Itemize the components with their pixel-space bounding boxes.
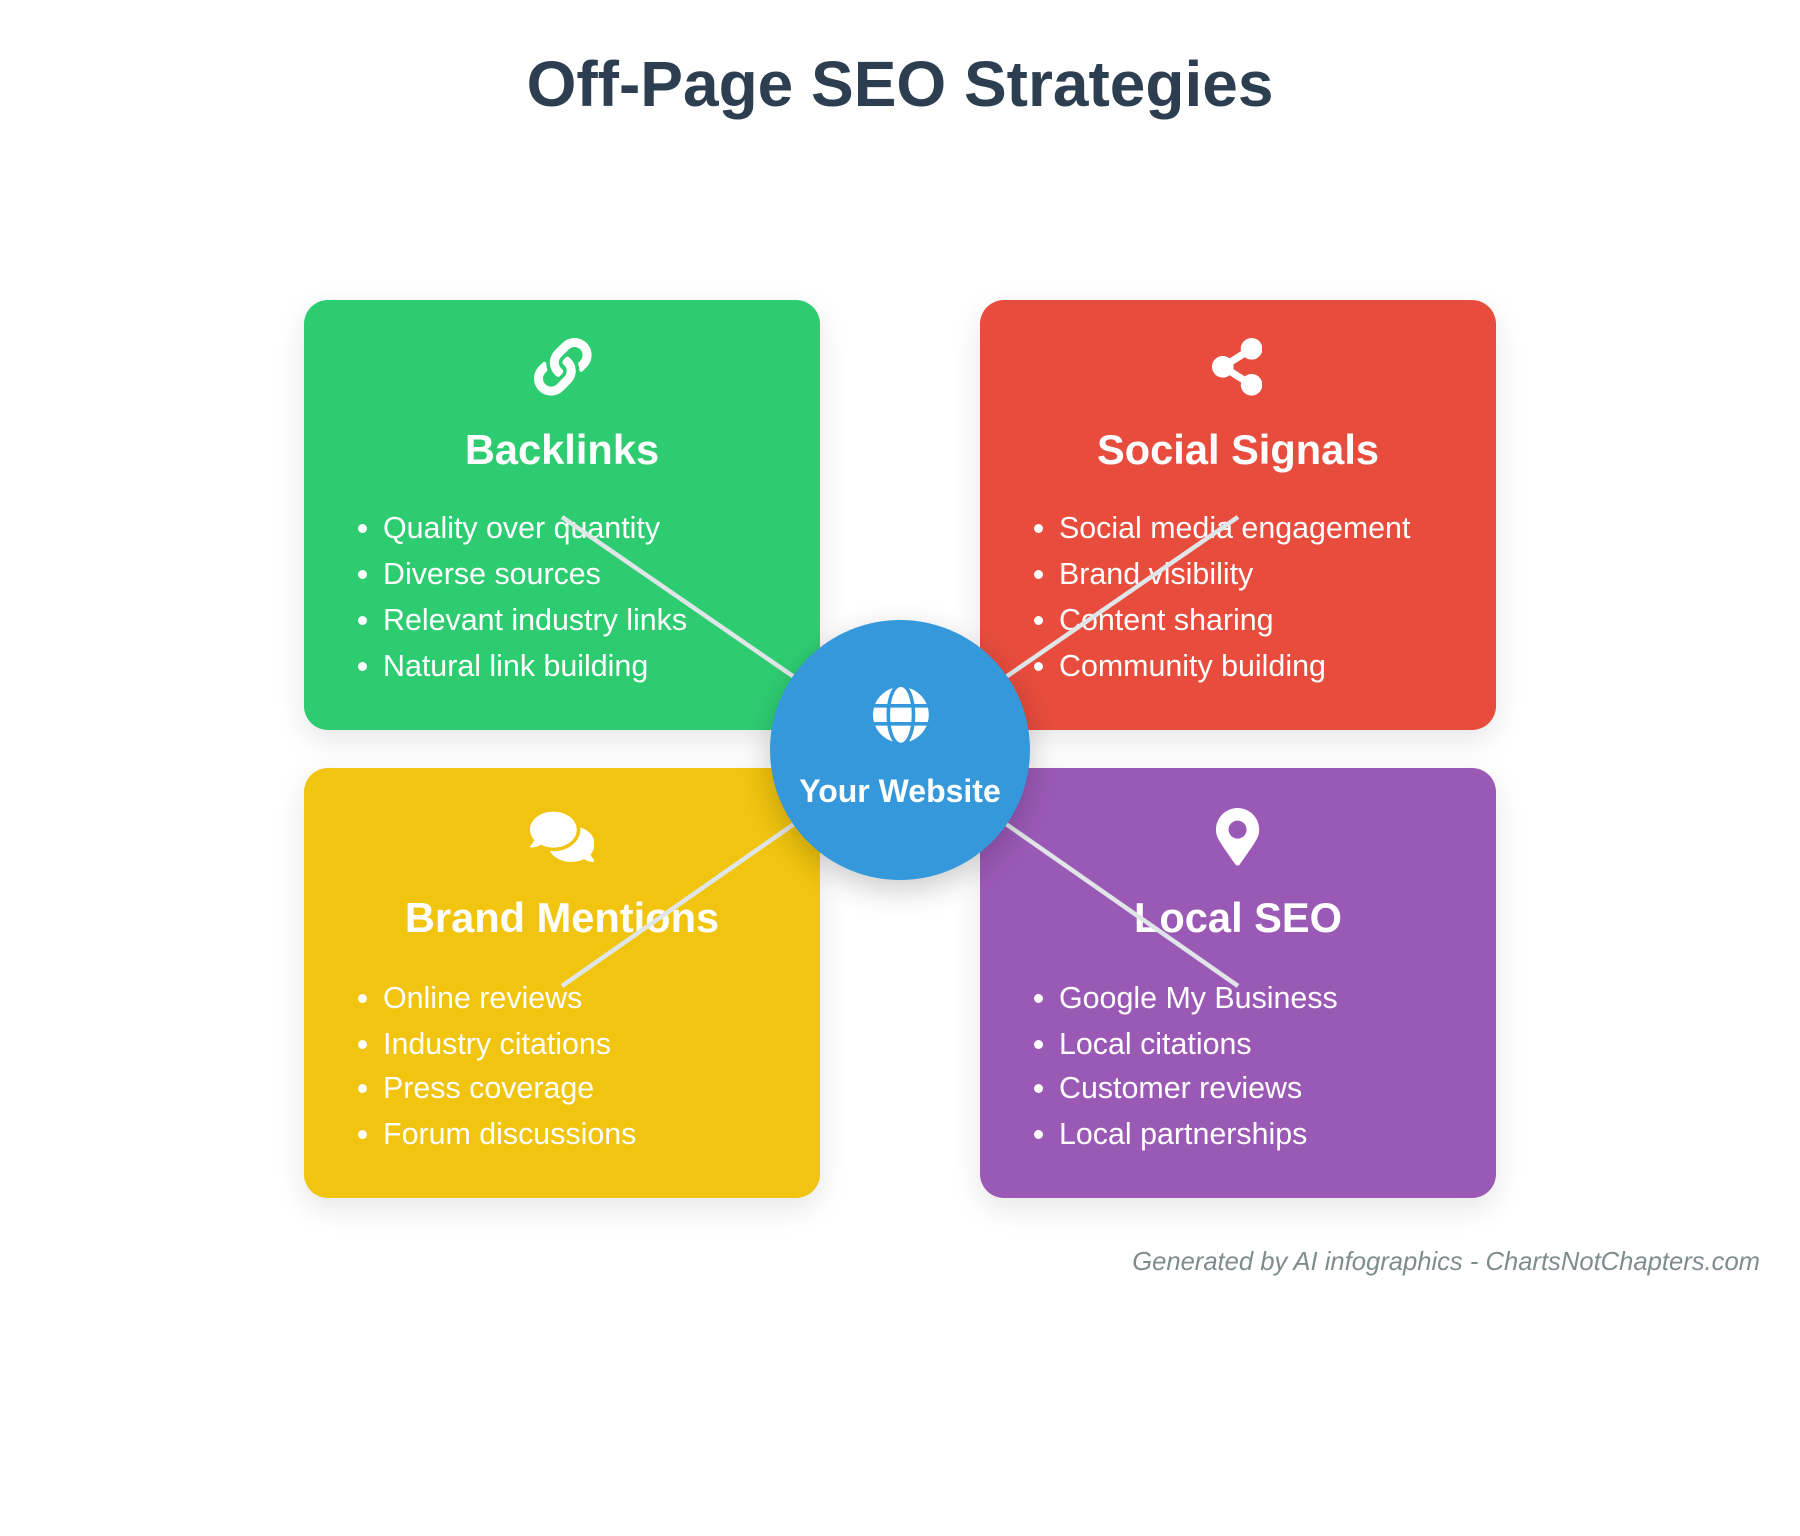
list: Local SEO tactics [1034, 981, 1338, 1151]
list: Brand Mentions tactics: Industry citations [383, 1027, 611, 1061]
list: Backlinks tactics: Relevant industry links [383, 603, 687, 637]
panel: Social Signals [980, 300, 1496, 730]
list: Backlinks tactics [358, 511, 687, 683]
panel: Backlinks [304, 300, 820, 730]
list: Social Signals tactics [1034, 511, 1410, 683]
list: Backlinks tactics: Quality over quantity [383, 511, 660, 545]
panel: Local SEO [980, 768, 1496, 1198]
heading: Backlinks: Backlinks [465, 426, 659, 473]
list: Local SEO tactics: Customer reviews [1059, 1071, 1302, 1105]
list: Local SEO tactics: Local partnerships [1059, 1117, 1307, 1151]
heading: Local SEO: Local SEO [1134, 894, 1342, 941]
list: Local SEO tactics: Local citations [1059, 1027, 1252, 1061]
icon: share [1212, 338, 1262, 396]
list: Social Signals tactics: Community building [1059, 649, 1326, 683]
panel: Brand Mentions [304, 768, 820, 1198]
list: Social Signals tactics: Brand visibility [1059, 557, 1253, 591]
list: Backlinks tactics: Natural link building [383, 649, 648, 683]
list: Backlinks tactics: Diverse sources [383, 557, 601, 591]
heading: Brand Mentions: Brand Mentions [405, 894, 719, 941]
icon: globe [873, 686, 929, 743]
icon: link [534, 338, 592, 396]
heading: Social Signals: Social Signals [1097, 426, 1379, 473]
title: Off-Page SEO Strategies [527, 48, 1273, 120]
list: Brand Mentions tactics [358, 981, 636, 1151]
list: Local SEO tactics: Google My Business [1059, 981, 1338, 1015]
label: Your Website: Your Website [799, 773, 1001, 809]
list: Brand Mentions tactics: Press coverage [383, 1071, 594, 1105]
list: Social Signals tactics: Content sharing [1059, 603, 1274, 637]
icon: map pin [1216, 808, 1260, 866]
list: Brand Mentions tactics: Forum discussions [383, 1117, 636, 1151]
icon: speech bubbles [530, 812, 594, 862]
footer credit: Generated by AI infographics - ChartsNotChapters.com [1132, 1248, 1760, 1276]
list: Brand Mentions tactics: Online reviews [383, 981, 582, 1015]
central hub: Your Website [770, 620, 1030, 880]
list: Social Signals tactics: Social media engagement [1059, 511, 1410, 545]
